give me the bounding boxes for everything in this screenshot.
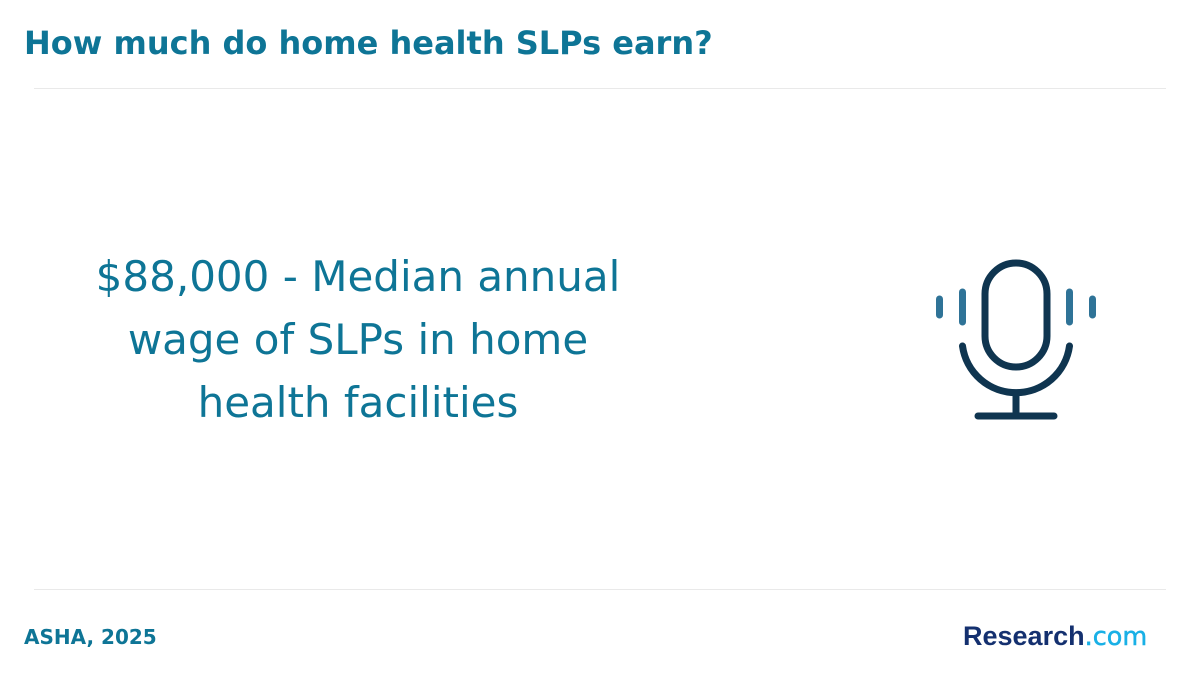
main statement <box>96 252 620 427</box>
icon: microphone <box>936 260 1096 420</box>
main statement: health facilities <box>198 378 518 427</box>
sound waves <box>940 292 1092 322</box>
microphone stand <box>1012 392 1020 416</box>
logo: Research.com: Research.com <box>963 621 1147 652</box>
microphone capsule <box>985 263 1047 367</box>
main statement: $88,000 - Median annual <box>96 252 620 301</box>
source: ASHA, 2025 <box>24 625 157 649</box>
microphone base <box>978 412 1054 420</box>
main statement: wage of SLPs in home <box>128 315 588 364</box>
microphone cradle <box>962 346 1070 393</box>
title: How much do home health SLPs earn? <box>24 24 713 62</box>
